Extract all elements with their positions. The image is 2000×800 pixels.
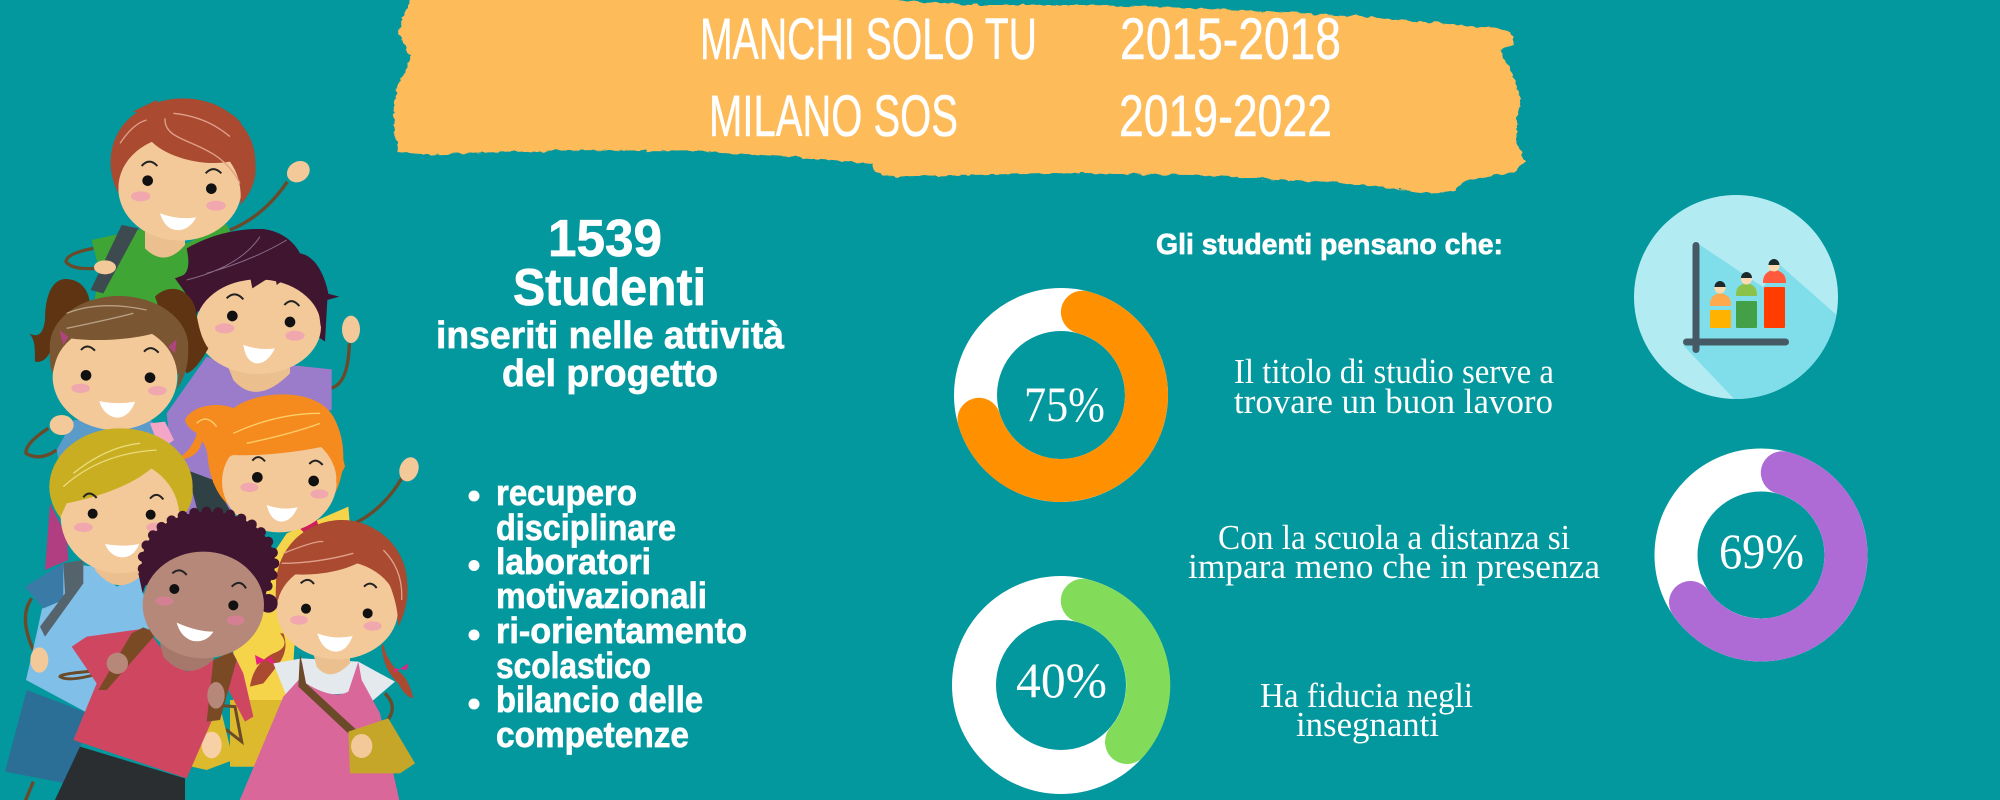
list text: recupero xyxy=(496,472,637,513)
brush stroke shape xyxy=(393,0,1525,193)
label: Studenti xyxy=(513,259,706,317)
caption: 69%: Con la scuola a distanza si xyxy=(1218,518,1570,557)
bullets xyxy=(468,490,480,710)
caption: 40%: Ha fiducia negli xyxy=(1260,676,1473,715)
section heading: Gli studenti pensano che: xyxy=(1156,229,1503,261)
left panel: student count xyxy=(436,210,785,395)
donut chart: 40%: 40% xyxy=(1016,652,1107,708)
caption: 40% xyxy=(1260,676,1473,744)
caption: 69% xyxy=(1188,518,1600,586)
child: purple shirt xyxy=(167,229,360,480)
title line 2: MILANO SOS xyxy=(709,84,958,149)
donut chart: 69%: 69% xyxy=(1719,523,1804,579)
list text: laboratori xyxy=(496,541,651,582)
donut chart: 69% xyxy=(1676,470,1846,640)
child: blonde hair, blue shirt xyxy=(5,428,193,800)
list text: ri-orientamento xyxy=(496,610,747,651)
list text: scolastico xyxy=(496,645,651,686)
child: green shirt xyxy=(66,98,314,307)
subtitle line 2: del progetto xyxy=(502,353,718,395)
donut chart: 40% xyxy=(974,598,1148,772)
years line 1: 2015-2018 xyxy=(1120,7,1341,72)
number: 1539 xyxy=(548,210,662,268)
child: curly hair, red shirt xyxy=(53,512,278,800)
header banner xyxy=(393,0,1525,193)
donut chart: 75% xyxy=(976,310,1146,480)
caption: 75%: Il titolo di studio serve a xyxy=(1234,352,1554,391)
list text: motivazionali xyxy=(496,575,707,616)
caption: 75%: trovare un buon lavoro xyxy=(1234,382,1553,421)
child: brown pigtails xyxy=(26,279,208,467)
caption: 75% xyxy=(1234,352,1554,421)
list text xyxy=(496,472,747,755)
subtitle line 1: inseriti nelle attività xyxy=(436,315,785,357)
activities bullet list xyxy=(468,472,747,755)
icon: bar chart with people xyxy=(1634,195,1845,405)
illustration: group of children xyxy=(5,98,422,800)
years line 2: 2019-2022 xyxy=(1119,84,1332,149)
caption: 40%: insegnanti xyxy=(1296,705,1439,744)
child: orange hair xyxy=(175,394,422,767)
list text: bilancio delle xyxy=(496,679,703,720)
list text: competenze xyxy=(496,714,689,755)
donut chart: 75%: 75% xyxy=(1024,376,1105,432)
title line 1: MANCHI SOLO TU xyxy=(700,7,1037,72)
child: pink dress xyxy=(238,520,415,800)
caption: 69%: impara meno che in presenza xyxy=(1188,547,1600,586)
list text: disciplinare xyxy=(496,507,676,548)
